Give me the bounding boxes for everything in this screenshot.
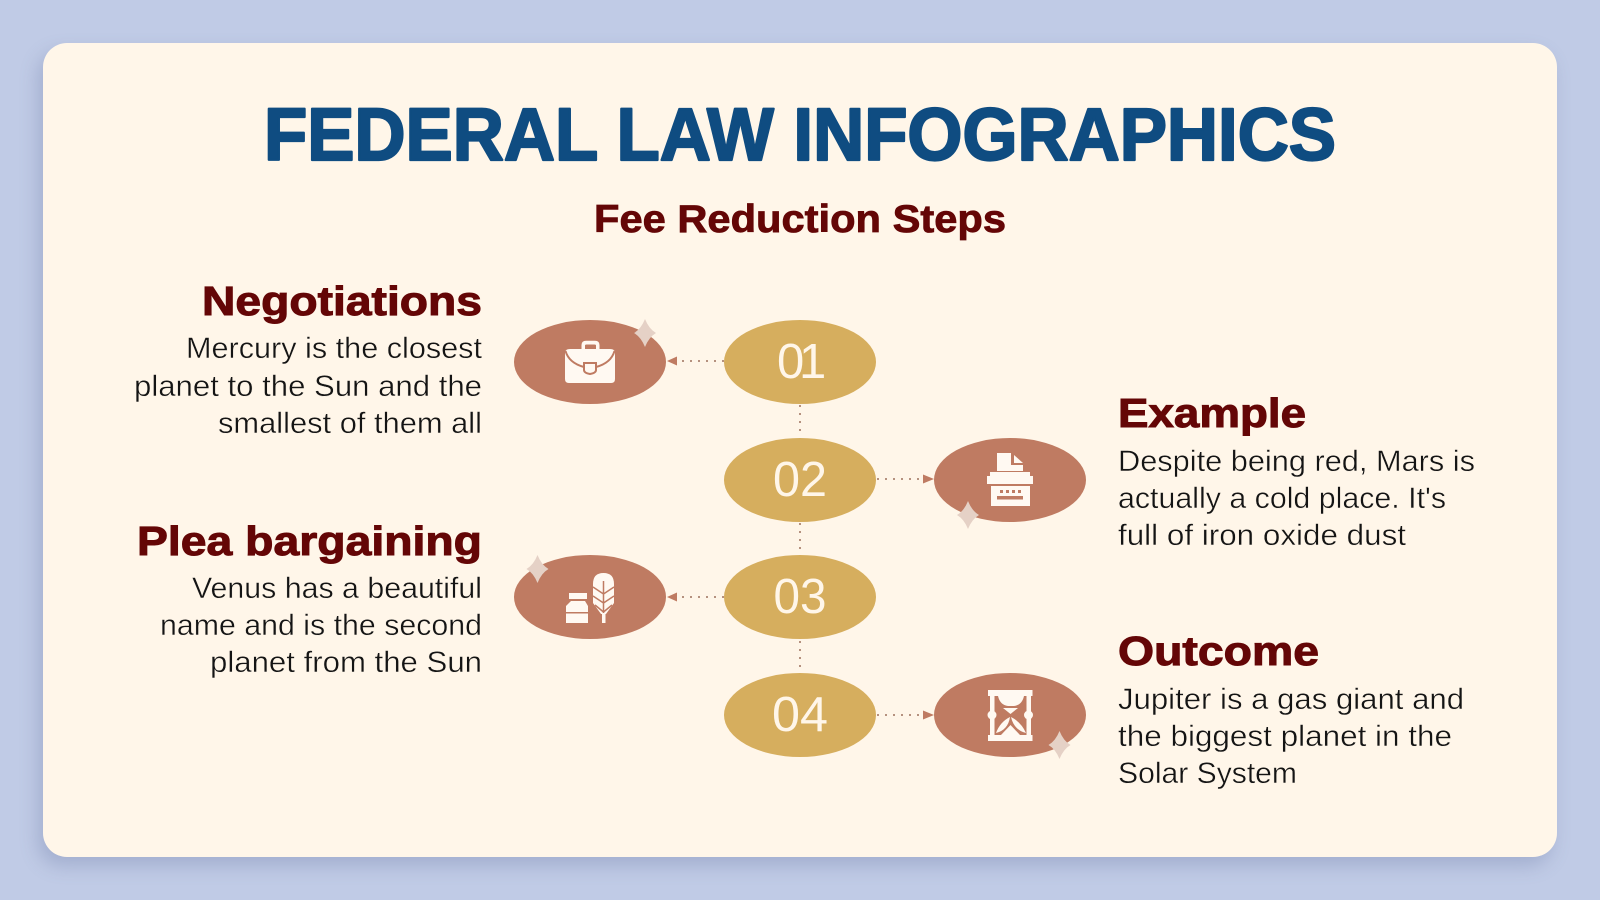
arrow: 01 to briefcase	[667, 356, 724, 366]
text block: Outcome: the biggest planet in the	[1118, 720, 1452, 753]
text block: Negotiations	[134, 278, 483, 440]
text block: Plea bargaining: planet from the Sun	[210, 646, 482, 679]
icon: sparkle 4	[1048, 731, 1070, 759]
text block: Plea bargaining: Venus has a beautiful	[192, 572, 482, 605]
title: FEDERAL LAW INFOGRAPHICS	[264, 93, 1336, 176]
step 04: 04	[772, 688, 828, 742]
text block: Example	[1118, 390, 1475, 552]
connector: vertical dotted spine	[799, 405, 801, 673]
icon: briefcase	[514, 320, 666, 404]
text block: Negotiations: Negotiations	[202, 278, 482, 324]
step 03	[724, 555, 876, 639]
text block: Negotiations: Mercury is the closest	[186, 332, 483, 365]
text block: Example: Despite being red, Mars is	[1118, 445, 1475, 478]
icon: typewriter	[934, 438, 1086, 522]
icon: sparkle 2	[957, 501, 979, 529]
text block: Example: Example	[1118, 390, 1306, 436]
arrow: 04 to hourglass	[877, 710, 934, 720]
text block: Outcome: Jupiter is a gas giant and	[1118, 683, 1464, 716]
step 03: 03	[774, 570, 826, 624]
text block: Negotiations: planet to the Sun and the	[134, 370, 482, 403]
text block: Outcome: Solar System	[1118, 757, 1297, 790]
text block: Outcome: Outcome	[1118, 628, 1319, 674]
text block: Example: full of iron oxide dust	[1118, 519, 1407, 552]
icon: sparkle 1	[634, 319, 656, 347]
step 02: 02	[773, 453, 827, 507]
arrow: 02 to typewriter	[877, 474, 934, 484]
icon: hourglass	[934, 673, 1086, 757]
step 01	[724, 320, 876, 404]
text block: Outcome	[1118, 628, 1464, 790]
text block: Plea bargaining: Plea bargaining	[137, 518, 482, 564]
step 04	[724, 673, 876, 757]
icon: sparkle 3	[526, 555, 548, 583]
text block: Plea bargaining: name and is the second	[160, 609, 482, 642]
text block: Plea bargaining	[137, 518, 482, 679]
arrow: 03 to feather	[667, 592, 724, 602]
step 02	[724, 438, 876, 522]
step 01: 01	[777, 335, 826, 389]
subtitle: Fee Reduction Steps	[594, 198, 1006, 241]
text block: Negotiations: smallest of them all	[218, 407, 482, 440]
icon: ink and feather	[514, 555, 666, 639]
text block: Example: actually a cold place. It's	[1118, 482, 1446, 515]
